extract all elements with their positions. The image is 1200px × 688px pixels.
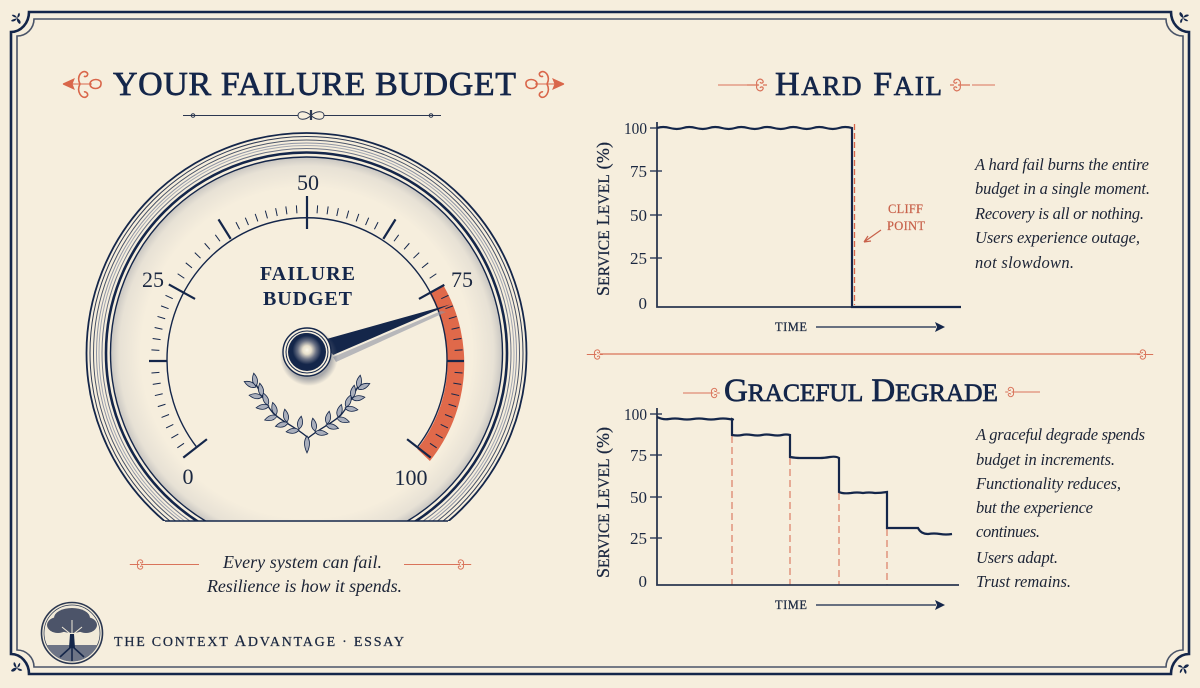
title divider: [183, 110, 441, 120]
axes: [657, 408, 959, 585]
cliff callout: [864, 202, 925, 242]
y axis ticks and labels: [624, 405, 662, 591]
graceful degrade description: A graceful degrade spends: [975, 425, 1145, 444]
tagline: [206, 552, 402, 596]
cliff marker: [854, 124, 856, 305]
y axis ticks and labels: 0: [638, 294, 647, 313]
y axis ticks and labels: 100: [624, 119, 647, 138]
heading: hard fail: HARD FAIL: [775, 66, 942, 103]
y axis ticks and labels: 25: [630, 529, 647, 548]
time axis label: TIME: [775, 598, 807, 612]
cliff callout: CLIFF: [888, 202, 923, 216]
service line: [657, 417, 952, 534]
footer label: THE CONTEXT ADVANTAGE · ESSAY: [114, 633, 404, 650]
title ornament left: [63, 72, 101, 97]
dial arc: [167, 218, 447, 447]
time axis label: [775, 320, 945, 334]
graceful degrade description: budget in increments.: [976, 450, 1115, 469]
chart: hard fail: [593, 119, 961, 334]
heading: graceful degrade: GRACEFUL DEGRADE: [724, 373, 998, 409]
tagline: Every system can fail.: [222, 552, 382, 572]
gauge label: [260, 263, 355, 310]
graceful degrade description: Users adapt.: [976, 548, 1058, 567]
y axis ticks and labels: 75: [630, 446, 647, 465]
time axis label: TIME: [775, 320, 807, 334]
y axis ticks and labels: 75: [630, 162, 647, 181]
hard fail description: Recovery is all or nothing.: [974, 204, 1144, 223]
hard fail description: not slowdown.: [975, 253, 1074, 272]
hard fail description: Users experience outage,: [975, 228, 1140, 247]
major ticks: [149, 196, 464, 458]
y axis label: SERVICE LEVEL (%): [593, 427, 614, 578]
hard fail description: A hard fail burns the entire: [974, 155, 1149, 174]
graceful degrade description: but the experience: [976, 498, 1093, 517]
tagline ornaments: [130, 560, 471, 569]
hard fail description: [974, 155, 1150, 272]
red burn zone: [417, 285, 464, 461]
title: YOUR FAILURE BUDGET: [113, 66, 516, 103]
service line: [657, 127, 961, 307]
scale numbers: 0: [182, 464, 194, 489]
graceful degrade description: Functionality reduces,: [975, 474, 1121, 493]
heading: hard fail: [718, 66, 995, 103]
tagline: Resilience is how it spends.: [206, 576, 402, 596]
section divider: [587, 350, 1153, 359]
hard fail description: budget in a single moment.: [975, 179, 1150, 198]
gauge label: FAILURE: [260, 263, 355, 285]
y axis ticks and labels: [624, 119, 662, 313]
scale numbers: 75: [451, 267, 473, 292]
logo: tree seal: [42, 602, 102, 664]
needle hub: [280, 328, 338, 386]
scale numbers: [142, 170, 473, 490]
y axis ticks and labels: 50: [630, 206, 647, 225]
title ornament right: [526, 72, 564, 97]
time axis label: [775, 598, 945, 612]
y axis ticks and labels: 50: [630, 488, 647, 507]
gauge bezel rings: [86, 132, 528, 521]
gauge base: [165, 520, 448, 522]
graceful degrade description: continues.: [976, 522, 1040, 541]
graceful degrade description: Trust remains.: [976, 572, 1071, 591]
step markers: [732, 436, 887, 585]
gauge: [86, 132, 528, 522]
y axis ticks and labels: 100: [624, 405, 647, 424]
needle: [323, 304, 450, 362]
y axis ticks and labels: 0: [638, 572, 647, 591]
chart: graceful degrade: [593, 405, 959, 612]
scale numbers: 50: [297, 170, 319, 195]
y axis ticks and labels: 25: [630, 249, 647, 268]
scale numbers: 100: [394, 465, 428, 490]
graceful degrade description: [975, 425, 1145, 591]
y axis label: SERVICE LEVEL (%): [593, 142, 614, 296]
minor ticks: [151, 205, 463, 448]
axes: [657, 122, 853, 307]
cliff callout: POINT: [887, 219, 925, 233]
scale numbers: 25: [142, 267, 164, 292]
gauge label: BUDGET: [263, 288, 353, 310]
laurel ornament: [243, 373, 371, 453]
